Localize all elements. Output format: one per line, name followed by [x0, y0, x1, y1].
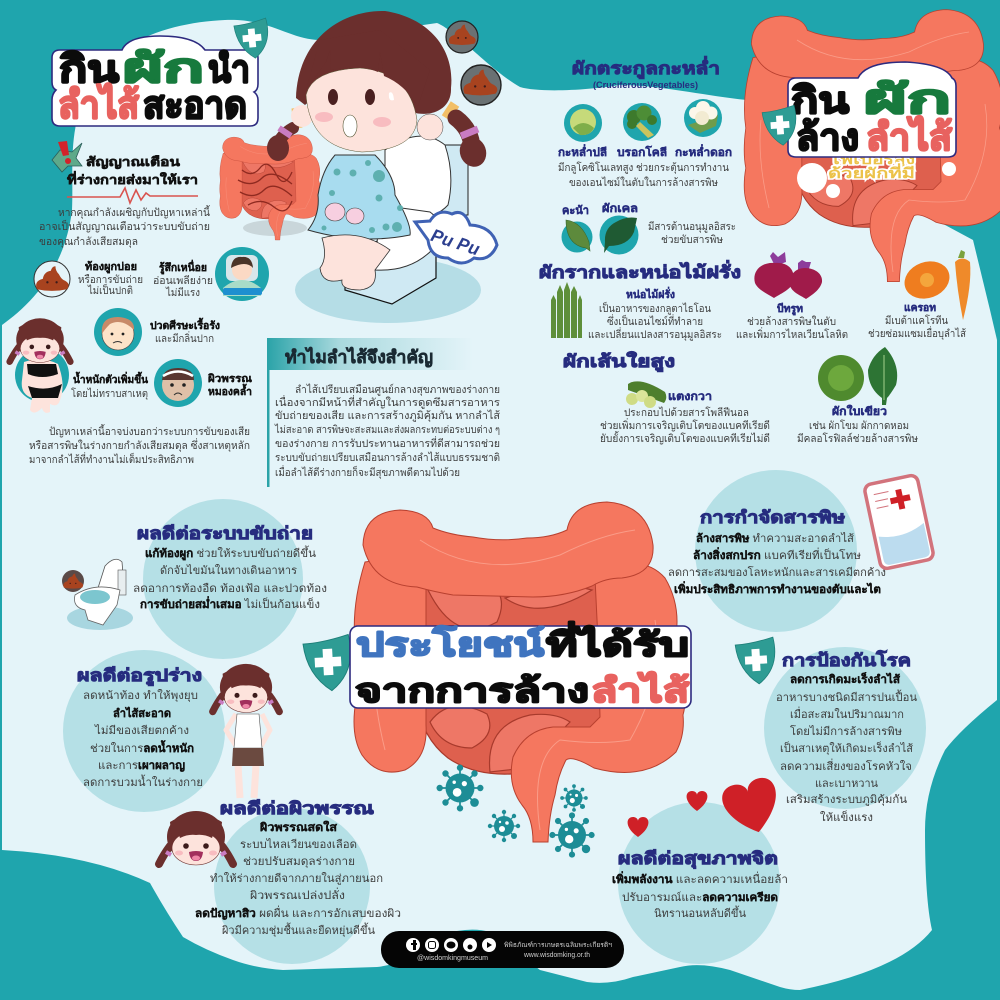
- body: ลดการสะสมของโลหะหนักและสารเคมีตกค้าง: [668, 565, 886, 579]
- handle: @wisdomkingmuseum: [417, 955, 488, 962]
- closing paragraph: หรือสารพิษในร่างกายกำลังเสียสมดุล ซึ่งสาเหตุหลัก: [29, 438, 250, 452]
- kale description: [648, 220, 736, 246]
- body: [83, 689, 203, 789]
- yellow subtitle: ไฟเบอร์สูง: [827, 150, 915, 168]
- kale description: ช่วยขับสารพิษ: [661, 234, 723, 246]
- girl head: [159, 811, 233, 865]
- carrot text: [868, 302, 967, 340]
- illustration: main girl on toilet: [267, 11, 490, 323]
- icon: toilet: [62, 559, 133, 630]
- body: ไม่มีของเสียตกค้าง: [94, 724, 189, 737]
- icon: hearts: [628, 775, 785, 839]
- icon: worried poop 1: [446, 21, 478, 53]
- icon: shield top: [233, 18, 270, 60]
- kale labels: [562, 202, 638, 217]
- title: eat vegetables clean colon: ผัก: [864, 78, 951, 122]
- heartbeat line: [67, 188, 198, 203]
- labels: บรอกโคลี: [617, 145, 667, 159]
- symptom: constipation: ไม่เป็นปกติ: [87, 283, 133, 297]
- asparagus text: ซึ่งเป็นเอนไซม์ที่ทำลาย: [607, 314, 703, 328]
- symptom: dull skin: หมองคล้ำ: [208, 383, 252, 398]
- body: ลดการบวมน้ำในร่างกาย: [83, 774, 203, 789]
- heading: ที่ร่างกายส่งมาให้เรา: [67, 171, 198, 187]
- title text: สะอาด: [143, 85, 247, 127]
- icon: shield: [303, 634, 353, 692]
- panel: high fibre vegetables: [563, 347, 918, 445]
- symptom: constipation: ท้องผูกบ่อย: [85, 260, 137, 274]
- symptom: weight gain: น้ำหนักตัวเพิ่มขึ้น: [73, 371, 149, 386]
- body: ล้างสารพิษ ทำความสะอาดลำไส้: [696, 532, 854, 545]
- panel: intro title: [52, 36, 258, 127]
- heading: ผักรากและหน่อไม้ฝรั่ง: [539, 260, 741, 282]
- intro paragraph: ของคุณกำลังเสียสมดุล: [39, 235, 138, 248]
- illustration: large colon: [354, 502, 685, 842]
- paragraph: ขับถ่ายของเสีย และการสร้างภูมิคุ้มกัน หากลำไส้: [275, 409, 501, 422]
- symptom: headache: และมีกลิ่นปาก: [155, 331, 214, 345]
- title: eat vegetables clean colon: ล้าง: [796, 117, 859, 158]
- panel: detox benefit: [668, 474, 934, 596]
- body: ผิวมีความชุ่มชื้นและยืดหยุ่นดีขึ้น: [221, 922, 375, 937]
- icon: shield right: [762, 105, 798, 147]
- carrot text: แครอท: [904, 302, 936, 314]
- body: [195, 820, 401, 937]
- icon: lettuce and spinach: [818, 347, 897, 405]
- body: ลดหน้าท้อง ทำให้พุงยุบ: [83, 689, 198, 702]
- title backing: [350, 626, 691, 708]
- greens text: ผักใบเขียว: [832, 404, 887, 418]
- body: เมื่อสะสมในปริมาณมาก: [790, 706, 904, 721]
- body: ผิวพรรณสดใส: [259, 820, 337, 834]
- cucumber text: ประกอบไปด้วยสารโพลีฟีนอล: [624, 406, 749, 419]
- symptom: constipation: [34, 260, 143, 297]
- asparagus text: เป็นอาหารของกลูตาไธโอน: [599, 301, 711, 315]
- heading: การกำจัดสารพิษ: [700, 508, 845, 527]
- title text: [355, 621, 690, 709]
- kale labels: ผักเคล: [602, 202, 638, 215]
- symptom: headache: ปวดศีรษะเรื้อรัง: [150, 317, 220, 332]
- body: [776, 672, 917, 824]
- paragraph: ของร่างกาย การรับประทานอาหารที่ดีสามารถช่วย: [275, 436, 500, 450]
- heading: ทำไมลำไส้จึงสำคัญ: [285, 346, 433, 368]
- cucumber text: ช่วยเพิ่มการเจริญเติบโตของแบคทีเรียดี: [600, 418, 770, 432]
- body: ล้างสิ่งสกปรก แบคทีเรียที่เป็นโทษ: [693, 547, 861, 562]
- beet text: บีทรูท: [777, 302, 803, 316]
- panel: cruciferous vegetables: (CruciferousVegetables): [593, 80, 698, 90]
- body: การขับถ่ายสม่ำเสมอ ไม่เป็นก้อนแข็ง: [140, 596, 320, 611]
- icon: shield: [735, 637, 777, 685]
- title text: กิน: [59, 49, 119, 91]
- kale description: มีสารต้านอนุมูลอิสระ: [648, 220, 736, 233]
- icon: warning: [52, 141, 82, 172]
- panel: skin benefit: [159, 798, 401, 937]
- heading: ผลดีต่อรูปร่าง: [77, 665, 202, 687]
- icon: cabbage: [564, 104, 602, 142]
- body: เป็นสาเหตุให้เกิดมะเร็งลำไส้: [780, 741, 913, 755]
- title: eat vegetables clean colon: กิน: [791, 80, 849, 121]
- body: โดยไม่มีการล้างสารพิษ: [790, 724, 902, 738]
- icon: IV bag: [864, 474, 934, 570]
- panel: why colon matters: [267, 338, 501, 487]
- symptom: fatigue: [153, 247, 269, 301]
- body: ทำให้ร่างกายดีจากภายในสู่ภายนอก: [210, 872, 383, 885]
- heading: ผลดีต่อผิวพรรณ: [220, 798, 374, 818]
- heading: สัญญาณเตือน: [86, 155, 181, 169]
- title text: [58, 47, 250, 127]
- body: แก้ท้องผูก ช่วยให้ระบบขับถ่ายดีขึ้น: [145, 545, 317, 561]
- body: เพิ่มพลังงาน และลดความเหนื่อยล้า: [612, 871, 788, 886]
- icon: carrot: [899, 250, 970, 320]
- body: ผิวพรรณเปล่งปลั่ง: [249, 887, 345, 902]
- paragraph: [274, 383, 501, 479]
- labels: กะหล่ำปลี: [558, 144, 607, 159]
- illustration: top right colon: [744, 10, 1000, 282]
- icon: asparagus: [551, 282, 582, 338]
- body: ช่วยปรับสมดุลร่างกาย: [243, 856, 355, 868]
- symptom: fatigue: อ่อนเพลียง่าย: [153, 274, 213, 287]
- beet text: [736, 302, 848, 341]
- website: www.wisdomking.or.th: [523, 952, 590, 959]
- title text: ลำไส้: [591, 671, 690, 709]
- symptom: dull skin: ผิวพรรณ: [207, 373, 252, 385]
- body: [668, 532, 886, 596]
- speech bubble: [415, 212, 497, 263]
- body: ลดความเสี่ยงของโรคหัวใจ: [780, 758, 912, 773]
- symptom: weight gain: โดยไม่ทราบสาเหตุ: [71, 387, 148, 400]
- intro paragraph: อาจเป็นสัญญาณเตือนว่าระบบขับถ่าย: [39, 219, 210, 233]
- panel: body shape benefit: [77, 664, 279, 798]
- icon: beetroot: [754, 252, 822, 299]
- icon: cauliflower: [684, 99, 722, 137]
- heading: ผักตระกูลกะหล่ำ: [572, 56, 720, 80]
- title: eat vegetables clean colon: [788, 62, 956, 158]
- symptom: weight gain: [10, 318, 149, 413]
- panel: mental health: [612, 775, 788, 920]
- paragraph: ระบบขับถ่ายเปรียบเสมือนการล้างลำไส้แบบธรรมชาติ: [275, 451, 500, 464]
- heading: ผักเส้นใยสูง: [563, 351, 675, 373]
- symptom: constipation: หรือการขับถ่าย: [78, 273, 143, 286]
- panel: disease prevention: [735, 637, 917, 824]
- icon: broccoli: [623, 103, 661, 141]
- title: eat vegetables clean colon: ลำไส้: [866, 115, 952, 158]
- body: ลดปัญหาสิว ผดผื่น และการอักเสบของผิว: [195, 905, 401, 920]
- panel: warning signs: [10, 141, 269, 466]
- body: เสริมสร้างระบบภูมิคุ้มกัน: [786, 794, 907, 806]
- beet text: ช่วยล้างสารพิษในตับ: [747, 315, 836, 328]
- paragraph: เนื่องจากมีหน้าที่สำคัญในการดูดซึมสารอาหาร: [275, 395, 500, 409]
- panel: roots and asparagus: [539, 250, 970, 341]
- social icons: [406, 938, 496, 952]
- body: และเบาหวาน: [815, 778, 878, 790]
- cucumber text: แตงกวา: [668, 391, 712, 403]
- labels: [558, 144, 732, 159]
- paragraph: ไม่สะอาด สารพิษจะสะสมและส่งผลกระทบต่อระบบต่าง ๆ: [274, 423, 500, 436]
- footer pill: [381, 931, 624, 968]
- title backing: [52, 36, 258, 126]
- heading: การป้องกันโรค: [782, 650, 911, 670]
- body: ลำไส้สะอาด: [113, 706, 171, 720]
- description: มีกลูโคซิโนเลทสูง ช่วยกระตุ้นการทำงาน: [558, 161, 729, 174]
- paragraph: เมื่อลำไส้ดีร่างกายก็จะมีสุขภาพดีตามไปด้วย: [275, 465, 460, 479]
- closing paragraph: [29, 424, 250, 466]
- greens text: มีคลอโรฟิลล์ช่วยล้างสารพิษ: [797, 432, 918, 445]
- body: และการเผาผลาญ: [98, 760, 185, 772]
- heading: ผลดีต่อระบบขับถ่าย: [137, 523, 313, 543]
- body: เพิ่มประสิทธิภาพการทำงานของตับและไต: [674, 581, 881, 596]
- intro paragraph: [39, 205, 211, 248]
- closing paragraph: ปัญหาเหล่านี้อาจบ่งบอกว่าระบบการขับของเสีย: [49, 424, 250, 438]
- carrot text: ช่วยซ่อมแซมเยื่อบุลำไส้: [868, 326, 967, 340]
- yellow subtitle: ด้วยผักที่มี: [828, 163, 915, 181]
- illustration: small colon: [220, 135, 322, 240]
- title text: ผัก: [123, 47, 204, 91]
- body: [133, 545, 327, 611]
- heading: ผลดีต่อสุขภาพจิต: [618, 848, 778, 869]
- body: ปรับอารมณ์และ ลดความเครียด: [622, 891, 778, 904]
- symptom: fatigue: รู้สึกเหนื่อย: [159, 259, 207, 275]
- body: อาหารบางชนิดมีสารปนเปื้อน: [776, 689, 917, 704]
- kale labels: คะน้า: [562, 204, 589, 217]
- asparagus text: หน่อไม้ฝรั่ง: [626, 286, 675, 301]
- title text: นำ: [208, 49, 250, 91]
- heading: [67, 155, 198, 187]
- greens text: [797, 404, 918, 445]
- symptom: fatigue: ไม่มีแรง: [165, 286, 200, 299]
- circles backgrounds: [63, 470, 926, 964]
- labels: กะหล่ำดอก: [675, 144, 732, 159]
- speech bubble: Pu Pu: [428, 225, 482, 259]
- icon: viruses: [437, 765, 595, 858]
- icon: chinese kale: [562, 220, 592, 252]
- title text: ลำไส้: [58, 83, 140, 127]
- symptom: dull skin: [154, 359, 252, 407]
- asparagus text: และเปลี่ยนแปลงสารอนุมูลอิสระ: [588, 327, 722, 341]
- cucumber text: ยับยั้งการเจริญเติบโตของแบคทีเรียไม่ดี: [600, 431, 770, 445]
- illustration: slim girl: [213, 664, 279, 798]
- icon: kale: [600, 216, 638, 254]
- description: [558, 161, 729, 189]
- paragraph: ลำไส้เปรียบเสมือนศูนย์กลางสุขภาพของร่างกาย: [295, 383, 500, 396]
- body: ให้แข็งแรง: [820, 810, 873, 824]
- asparagus text: [588, 286, 722, 341]
- title: benefits of colon cleanse: [303, 621, 691, 709]
- body: ลดอาการท้องอืด ท้องเฟ้อ และปวดท้อง: [133, 582, 327, 595]
- body: ช่วยในการลดน้ำหนัก: [90, 740, 194, 755]
- beet text: และเพิ่มการไหลเวียนโลหิต: [736, 327, 848, 341]
- carrot text: มีเบต้าแคโรทีน: [885, 314, 948, 327]
- body: ระบบไหลเวียนของเลือด: [240, 838, 357, 851]
- body: [612, 871, 788, 920]
- museum name: พิพิธภัณฑ์การเกษตรเฉลิมพระเกียรติฯ: [504, 941, 612, 949]
- title text: ที่ได้รับ: [546, 621, 689, 663]
- title text: ประโยชน์: [356, 625, 545, 663]
- panel: excretory benefit: [62, 523, 327, 630]
- closing paragraph: มาจากลำไส้ที่ทำงานไม่เต็มประสิทธิภาพ: [29, 452, 194, 466]
- title text: จากการล้าง: [355, 672, 589, 709]
- body: ดักจับไขมันในทางเดินอาหาร: [160, 564, 297, 577]
- cucumber text: [600, 391, 770, 445]
- panel: cruciferous vegetables: [558, 56, 736, 254]
- body: นิทรานอนหลับดีขึ้น: [654, 905, 746, 920]
- icon: cucumber: [626, 381, 666, 408]
- greens text: เช่น ผักโขม ผักกาดหอม: [809, 419, 909, 432]
- icon: worried poop 2: [461, 65, 501, 105]
- yellow subtitle: [797, 150, 956, 198]
- description: ของเอนไซม์ในตับในการล้างสารพิษ: [569, 176, 718, 189]
- intro paragraph: หากคุณกำลังเผชิญกับปัญหาเหล่านี้: [58, 205, 211, 219]
- symptom: headache: [94, 308, 220, 356]
- body: ลดการเกิดมะเร็งลำไส้: [790, 672, 900, 686]
